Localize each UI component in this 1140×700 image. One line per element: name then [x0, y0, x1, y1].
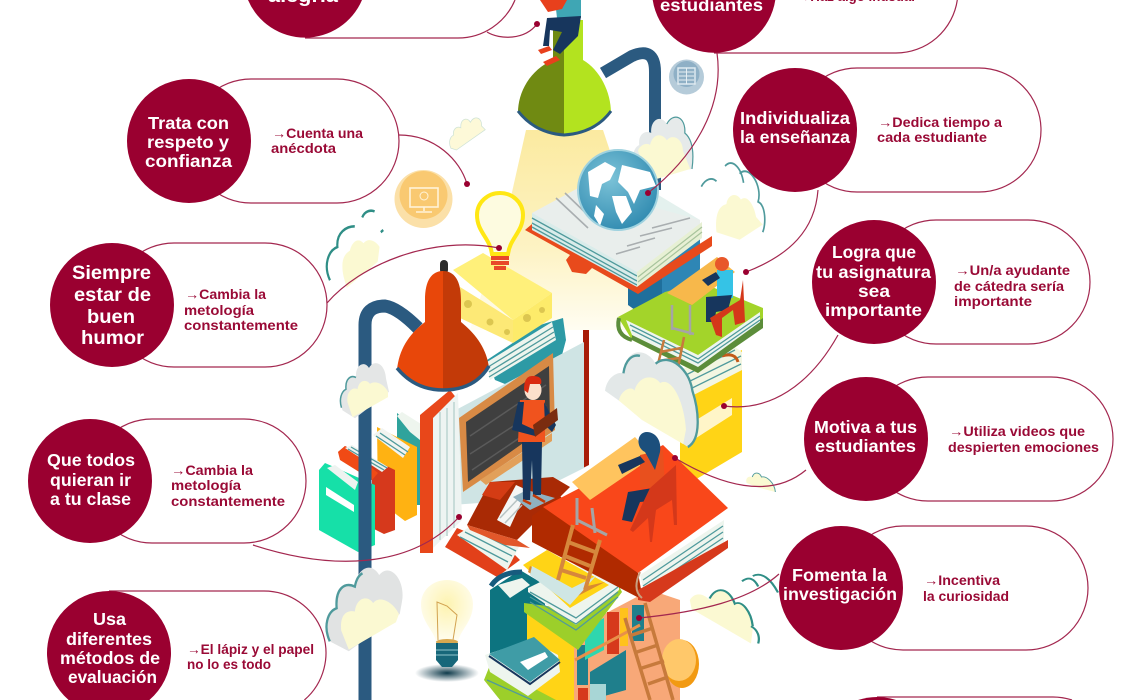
red lamp [397, 260, 489, 390]
bottom tower teal book [490, 570, 545, 660]
cloud: left pole upper [340, 363, 389, 418]
standing open book [420, 330, 589, 553]
panel: fomenta: →Incentiva [924, 573, 1001, 588]
panel: logra que: tu asignatura [816, 262, 931, 282]
panel: individualiza: Individualiza [740, 108, 850, 128]
panel: fomenta: investigación [783, 584, 897, 604]
bottom books with label [484, 637, 560, 700]
panel: trata con respeto: respeto y [147, 132, 229, 152]
panel: que todos quieran ir: constantemente [171, 494, 286, 509]
panel: bottom right [858, 697, 1072, 700]
panel: estudiantes [653, 0, 957, 53]
panel: motiva: →Utiliza videos que [949, 424, 1086, 439]
yellow book, right [680, 345, 742, 487]
cloud: right of globe [701, 163, 765, 240]
panel: trata con respeto [127, 79, 399, 203]
panel: trata con respeto: confianza [145, 151, 232, 171]
panel: logra que: sea [858, 281, 890, 301]
panel: individualiza: cada estudiante [877, 130, 988, 145]
panel: siempre de buen humor: →Cambia la [185, 287, 267, 302]
panel: que todos quieran ir [28, 419, 306, 543]
panel: que todos quieran ir: a tu clase [50, 489, 131, 509]
panel: siempre de buen humor: constantemente [184, 318, 299, 333]
panel: alegría [248, 0, 515, 38]
shelf with books [527, 590, 680, 700]
cheese [453, 253, 552, 343]
student at lower desk [572, 432, 677, 542]
panel: usa diferentes métodos: Usa [93, 609, 126, 629]
panel: usa diferentes métodos [47, 591, 326, 700]
panel: logra que: →Un/a ayudante [955, 263, 1071, 278]
blue vertical book behind top book [628, 190, 700, 318]
icon: book bubble [669, 60, 704, 94]
ladder on green book [657, 337, 684, 368]
panel: trata con respeto: →Cuenta una [272, 126, 364, 141]
green book with desk [618, 282, 763, 373]
panel: siempre de buen humor: estar de [74, 285, 151, 306]
teacher [512, 376, 558, 504]
globe [578, 150, 658, 230]
big red book [532, 445, 728, 602]
seated person on lamp [538, 0, 581, 66]
panel: usa diferentes métodos: no lo es todo [187, 657, 271, 672]
cloud: behind arm [633, 117, 693, 181]
books beneath cheese [487, 318, 566, 388]
connector lines [253, 21, 838, 621]
panel: motiva: Motiva a tus [814, 417, 917, 437]
panel: trata con respeto: Trata con [148, 113, 229, 133]
ladder between books [558, 525, 600, 590]
panel: logra que [812, 220, 1090, 344]
panel: que todos quieran ir: metología [171, 478, 242, 493]
panel: logra que: de cátedra sería [954, 279, 1065, 294]
panel: usa diferentes métodos: →El lápiz y el papel [187, 642, 314, 657]
cloud: large centre [605, 352, 698, 447]
panel: usa diferentes métodos: métodos de [60, 648, 160, 668]
book base under teacher [445, 477, 570, 577]
icon: monitor bulb bubble [394, 170, 452, 228]
panel: siempre de buen humor: humor [81, 328, 145, 349]
panel: individualiza: →Dedica tiempo a [878, 115, 1003, 130]
panel: usa diferentes métodos: evaluación [68, 667, 157, 687]
cloud: small right [746, 473, 775, 492]
green lamp [518, 20, 611, 135]
lower light bulb [415, 580, 479, 682]
panel: siempre de buen humor: metología [184, 303, 255, 318]
cloud: small upper left [450, 118, 485, 150]
light cone from green lamp [470, 130, 640, 330]
panel: trata con respeto: anécdota [271, 141, 337, 156]
panel: siempre de buen humor: Siempre [72, 263, 151, 284]
panel: individualiza [733, 68, 1041, 192]
panel: siempre de buen humor [50, 243, 327, 367]
panel: que todos quieran ir: →Cambia la [171, 463, 254, 478]
green lamp arm [603, 53, 655, 190]
panel: logra que: Logra que [832, 242, 916, 262]
panel: individualiza: la enseñanza [740, 127, 850, 147]
open book with globe [525, 187, 712, 294]
stack of books under ladder [523, 550, 622, 650]
panel: siempre de buen humor: buen [87, 307, 135, 328]
left pole and lamp arm [365, 306, 418, 700]
panel: que todos quieran ir: quieran ir [50, 470, 131, 490]
panel: logra que: importante [954, 294, 1033, 309]
light bulb yellow [477, 193, 523, 270]
panel: motiva: estudiantes [815, 436, 916, 456]
cloud: left teal [327, 211, 383, 288]
panel: fomenta: Fomenta la [792, 565, 887, 585]
cloud: left pole lower [327, 568, 403, 651]
left books [319, 412, 421, 552]
ladder bottom [625, 603, 673, 700]
panel: logra que: importante [825, 300, 922, 320]
panel: fomenta [779, 526, 1088, 650]
panel: motiva: despierten emociones [948, 440, 1099, 455]
panel: fomenta: la curiosidad [923, 589, 1009, 604]
cloud: lower right [690, 575, 778, 644]
panel: que todos quieran ir: Que todos [47, 450, 135, 470]
panel: usa diferentes métodos: diferentes [66, 629, 152, 649]
student at top desk [667, 257, 745, 337]
bottom coin [662, 639, 699, 688]
panel: motiva [804, 377, 1113, 501]
